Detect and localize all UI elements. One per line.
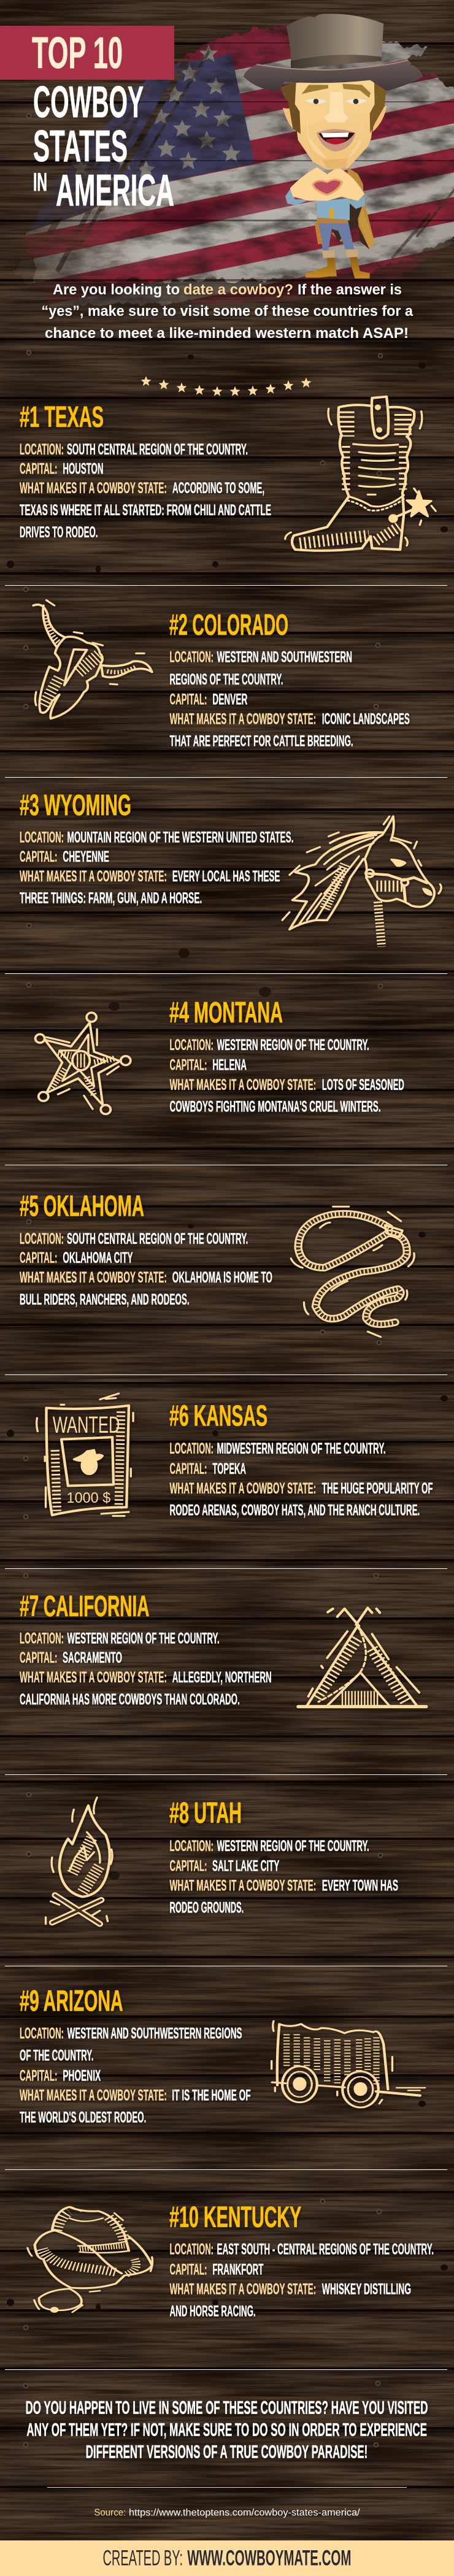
facts: Utah: LOCATION:: [169, 1838, 214, 1855]
intro text: chance to meet a like-minded western match ASAP!: [45, 325, 409, 342]
facts: Kentucky: FRANKFORT: [212, 2261, 263, 2279]
title banner: [0, 26, 174, 80]
heading: #6 Kansas: #6 KANSAS: [169, 1400, 267, 1433]
title: cowboy states in america: AMERICA: [56, 166, 174, 215]
facts: Utah: CAPITAL:: [169, 1857, 207, 1874]
character boots: [322, 250, 335, 258]
flag stars: [72, 44, 240, 189]
divider: [5, 2369, 447, 2370]
source line: https://www.thetoptens.com/cowboy-states-america/: [129, 2508, 360, 2518]
panel: #8 Utah: [46, 1797, 398, 1924]
facts: Kentucky: LOCATION:: [169, 2241, 214, 2258]
intro text: “yes”, make sure to visit some of these countries for a: [42, 303, 414, 320]
facts: Kentucky: AND HORSE RACING.: [169, 2303, 256, 2320]
facts: Kansas: LOCATION:: [169, 1440, 214, 1457]
heading: #4 Montana: #4 MONTANA: [169, 997, 283, 1029]
character eyes: [306, 99, 327, 104]
facts: California: ALLEGEDLY, NORTHERN: [172, 1669, 272, 1686]
facts: Wyoming: CAPITAL:: [20, 848, 58, 865]
divider: [5, 777, 447, 778]
icon: wanted poster: [37, 1393, 133, 1516]
facts: Kansas: [169, 1440, 433, 1519]
facts: Colorado: [169, 649, 410, 749]
divider: [5, 1374, 447, 1375]
character coat: [331, 167, 375, 250]
facts: Wyoming: THREE THINGS: FARM, GUN, AND A HORSE.: [20, 889, 202, 907]
character hands: [290, 167, 364, 201]
character hat crown: [287, 13, 383, 66]
character brows: [302, 85, 328, 94]
character sleeves: [285, 188, 310, 205]
character mouth: [317, 129, 355, 151]
divider: [5, 585, 447, 586]
facts: Texas: DRIVES TO RODEO.: [20, 524, 98, 541]
facts: Wyoming: CHEYENNE: [63, 848, 109, 865]
facts: Oklahoma: WHAT MAKES IT A COWBOY STATE:: [20, 1269, 167, 1286]
facts: Oklahoma: LOCATION:: [20, 1230, 64, 1248]
facts: Arizona: [20, 2025, 251, 2126]
facts: Arizona: PHOENIX: [63, 2068, 101, 2085]
facts: Oklahoma: SOUTH CENTRAL REGION OF THE COUNTRY.: [67, 1230, 248, 1248]
character belt: [317, 218, 348, 223]
facts: Kansas: CAPITAL:: [169, 1460, 207, 1478]
facts: Arizona: IT IS THE HOME OF: [172, 2087, 251, 2104]
facts: Wyoming: EVERY LOCAL HAS THESE: [172, 868, 280, 885]
facts: Arizona: CAPITAL:: [20, 2068, 58, 2085]
facts: Oklahoma: [20, 1230, 272, 1308]
facts: Arizona: OF THE COUNTRY.: [20, 2047, 93, 2064]
facts: Colorado: REGIONS OF THE COUNTRY.: [169, 671, 283, 688]
facts: Texas: SOUTH CENTRAL REGION OF THE COUNTRY.: [67, 441, 248, 458]
icon: wanted poster: WANTED: [53, 1412, 120, 1438]
panel: #7 California: [20, 1590, 426, 1708]
facts: California: CALIFORNIA HAS MORE COWBOYS THAN COLORADO.: [20, 1691, 240, 1708]
divider: [5, 973, 447, 974]
facts: Oklahoma: OKLAHOMA CITY: [63, 1249, 133, 1267]
intro text: [42, 282, 414, 342]
facts: California: WESTERN REGION OF THE COUNTRY.: [67, 1630, 220, 1647]
facts: Utah: WHAT MAKES IT A COWBOY STATE:: [169, 1877, 316, 1894]
facts: Kansas: TOPEKA: [212, 1460, 246, 1478]
facts: Texas: LOCATION:: [20, 441, 64, 458]
facts: Kentucky: WHAT MAKES IT A COWBOY STATE:: [169, 2281, 316, 2298]
hero: American flag: [13, 25, 454, 309]
facts: Utah: RODEO GROUNDS.: [169, 1899, 244, 1916]
character vest: [317, 198, 350, 220]
facts: Utah: [169, 1838, 398, 1916]
character holster and knife: [315, 223, 323, 244]
heading: #10 Kentucky: #10 KENTUCKY: [169, 2201, 301, 2234]
panel: #3 Wyoming: [20, 789, 441, 947]
facts: Kansas: WHAT MAKES IT A COWBOY STATE:: [169, 1480, 316, 1497]
intro text: Are you looking to: [53, 282, 180, 298]
closing text: [26, 2398, 428, 2463]
facts: Arizona: LOCATION:: [20, 2025, 64, 2042]
panel: #9 Arizona: [20, 1985, 425, 2126]
heading: #1 Texas: #1 TEXAS: [20, 401, 104, 434]
character nose: [323, 92, 348, 122]
footer bar: [0, 2540, 454, 2576]
title: cowboy states in america: STATES: [33, 121, 128, 171]
facts: Texas: ACCORDING TO SOME,: [172, 480, 264, 497]
facts: Montana: WHAT MAKES IT A COWBOY STATE:: [169, 1076, 316, 1094]
panel: #1 Texas: [20, 397, 436, 551]
facts: Montana: CAPITAL:: [169, 1056, 207, 1073]
icon: horse head: [282, 816, 441, 947]
facts: California: WHAT MAKES IT A COWBOY STATE:: [20, 1669, 167, 1686]
facts: Arizona: WHAT MAKES IT A COWBOY STATE:: [20, 2087, 167, 2104]
facts: California: LOCATION:: [20, 1630, 64, 1647]
facts: Colorado: LOCATION:: [169, 649, 214, 666]
divider: [5, 1568, 447, 1569]
panel: #4 Montana: [36, 997, 404, 1115]
title: cowboy states in america: COWBOY: [33, 77, 144, 127]
intro text: If the answer is: [298, 282, 402, 298]
heading: #3 Wyoming: #3 WYOMING: [20, 789, 131, 822]
facts: Kentucky: [169, 2241, 434, 2320]
icon: campfire: [46, 1798, 112, 1924]
icon: covered wagon: [272, 2021, 425, 2107]
icon: lasso rope: [291, 1206, 414, 1337]
facts: Arizona: WESTERN AND SOUTHWESTERN REGIONS: [67, 2025, 242, 2042]
facts: Texas: WHAT MAKES IT A COWBOY STATE:: [20, 480, 167, 497]
hero: cowboy character: [244, 13, 423, 278]
source line: Source:: [94, 2508, 126, 2518]
footer credit: [103, 2546, 351, 2570]
title: top 10: TOP 10: [32, 28, 123, 78]
facts: Montana: LOCATION:: [169, 1037, 214, 1054]
facts: Wyoming: LOCATION:: [20, 829, 64, 846]
facts: Montana: [169, 1037, 404, 1115]
divider: [5, 1774, 447, 1775]
icon: cowboy boot with spur: [285, 397, 436, 551]
icon: sheriff star badge: [36, 1013, 131, 1114]
facts: Colorado: WHAT MAKES IT A COWBOY STATE:: [169, 711, 316, 728]
panel: #2 Colorado: [33, 600, 410, 749]
facts: Oklahoma: CAPITAL:: [20, 1249, 58, 1267]
facts: Arizona: THE WORLD'S OLDEST RODEO.: [20, 2109, 146, 2126]
character ears: [283, 108, 296, 131]
character face: [293, 79, 375, 170]
facts: California: CAPITAL:: [20, 1649, 58, 1666]
facts: Texas: [20, 441, 271, 541]
footer credit: CREATED BY:: [103, 2546, 183, 2570]
heading: #8 Utah: #8 UTAH: [169, 1797, 242, 1830]
character trousers: [318, 221, 354, 250]
facts: Kentucky: CAPITAL:: [169, 2261, 207, 2279]
facts: Colorado: DENVER: [212, 691, 247, 708]
heading: #2 Colorado: #2 COLORADO: [169, 609, 288, 642]
icon: tent: [298, 1608, 426, 1706]
icon: cowboy hat with rope: [28, 2207, 153, 2312]
divider: [5, 2169, 447, 2170]
facts: Wyoming: WHAT MAKES IT A COWBOY STATE:: [20, 868, 167, 885]
decorative star arc: [141, 376, 311, 396]
source divider: [47, 2487, 407, 2488]
facts: Colorado: CAPITAL:: [169, 691, 207, 708]
facts: Utah: SALT LAKE CITY: [212, 1857, 280, 1874]
icon: wanted poster: 1000 $: [67, 1490, 110, 1506]
flag canton: [25, 54, 255, 233]
facts: California: [20, 1630, 272, 1708]
facts: Oklahoma: OKLAHOMA IS HOME TO: [172, 1269, 272, 1286]
heading: #9 Arizona: #9 ARIZONA: [20, 1985, 123, 2018]
heading: #5 Oklahoma: #5 OKLAHOMA: [20, 1190, 144, 1222]
icon: longhorn skull: [33, 600, 152, 719]
title: cowboy states in america: [33, 77, 174, 215]
panel: #10 Kentucky: [28, 2201, 434, 2320]
heading: #7 California: #7 CALIFORNIA: [20, 1590, 150, 1623]
facts: Texas: CAPITAL:: [20, 460, 58, 477]
intro text: date a cowboy?: [183, 282, 293, 298]
facts: Oklahoma: BULL RIDERS, RANCHERS, AND RODEOS.: [20, 1291, 190, 1308]
panel: #5 Oklahoma: [20, 1190, 414, 1337]
character hair: [281, 82, 301, 134]
facts: Wyoming: [20, 829, 293, 907]
facts: Texas: HOUSTON: [63, 460, 103, 477]
title: cowboy states in america: IN: [33, 167, 47, 196]
character hat brim: [244, 60, 423, 91]
panel: #6 Kansas: [37, 1393, 433, 1519]
facts: California: SACRAMENTO: [63, 1649, 122, 1666]
facts: Montana: HELENA: [212, 1056, 247, 1073]
